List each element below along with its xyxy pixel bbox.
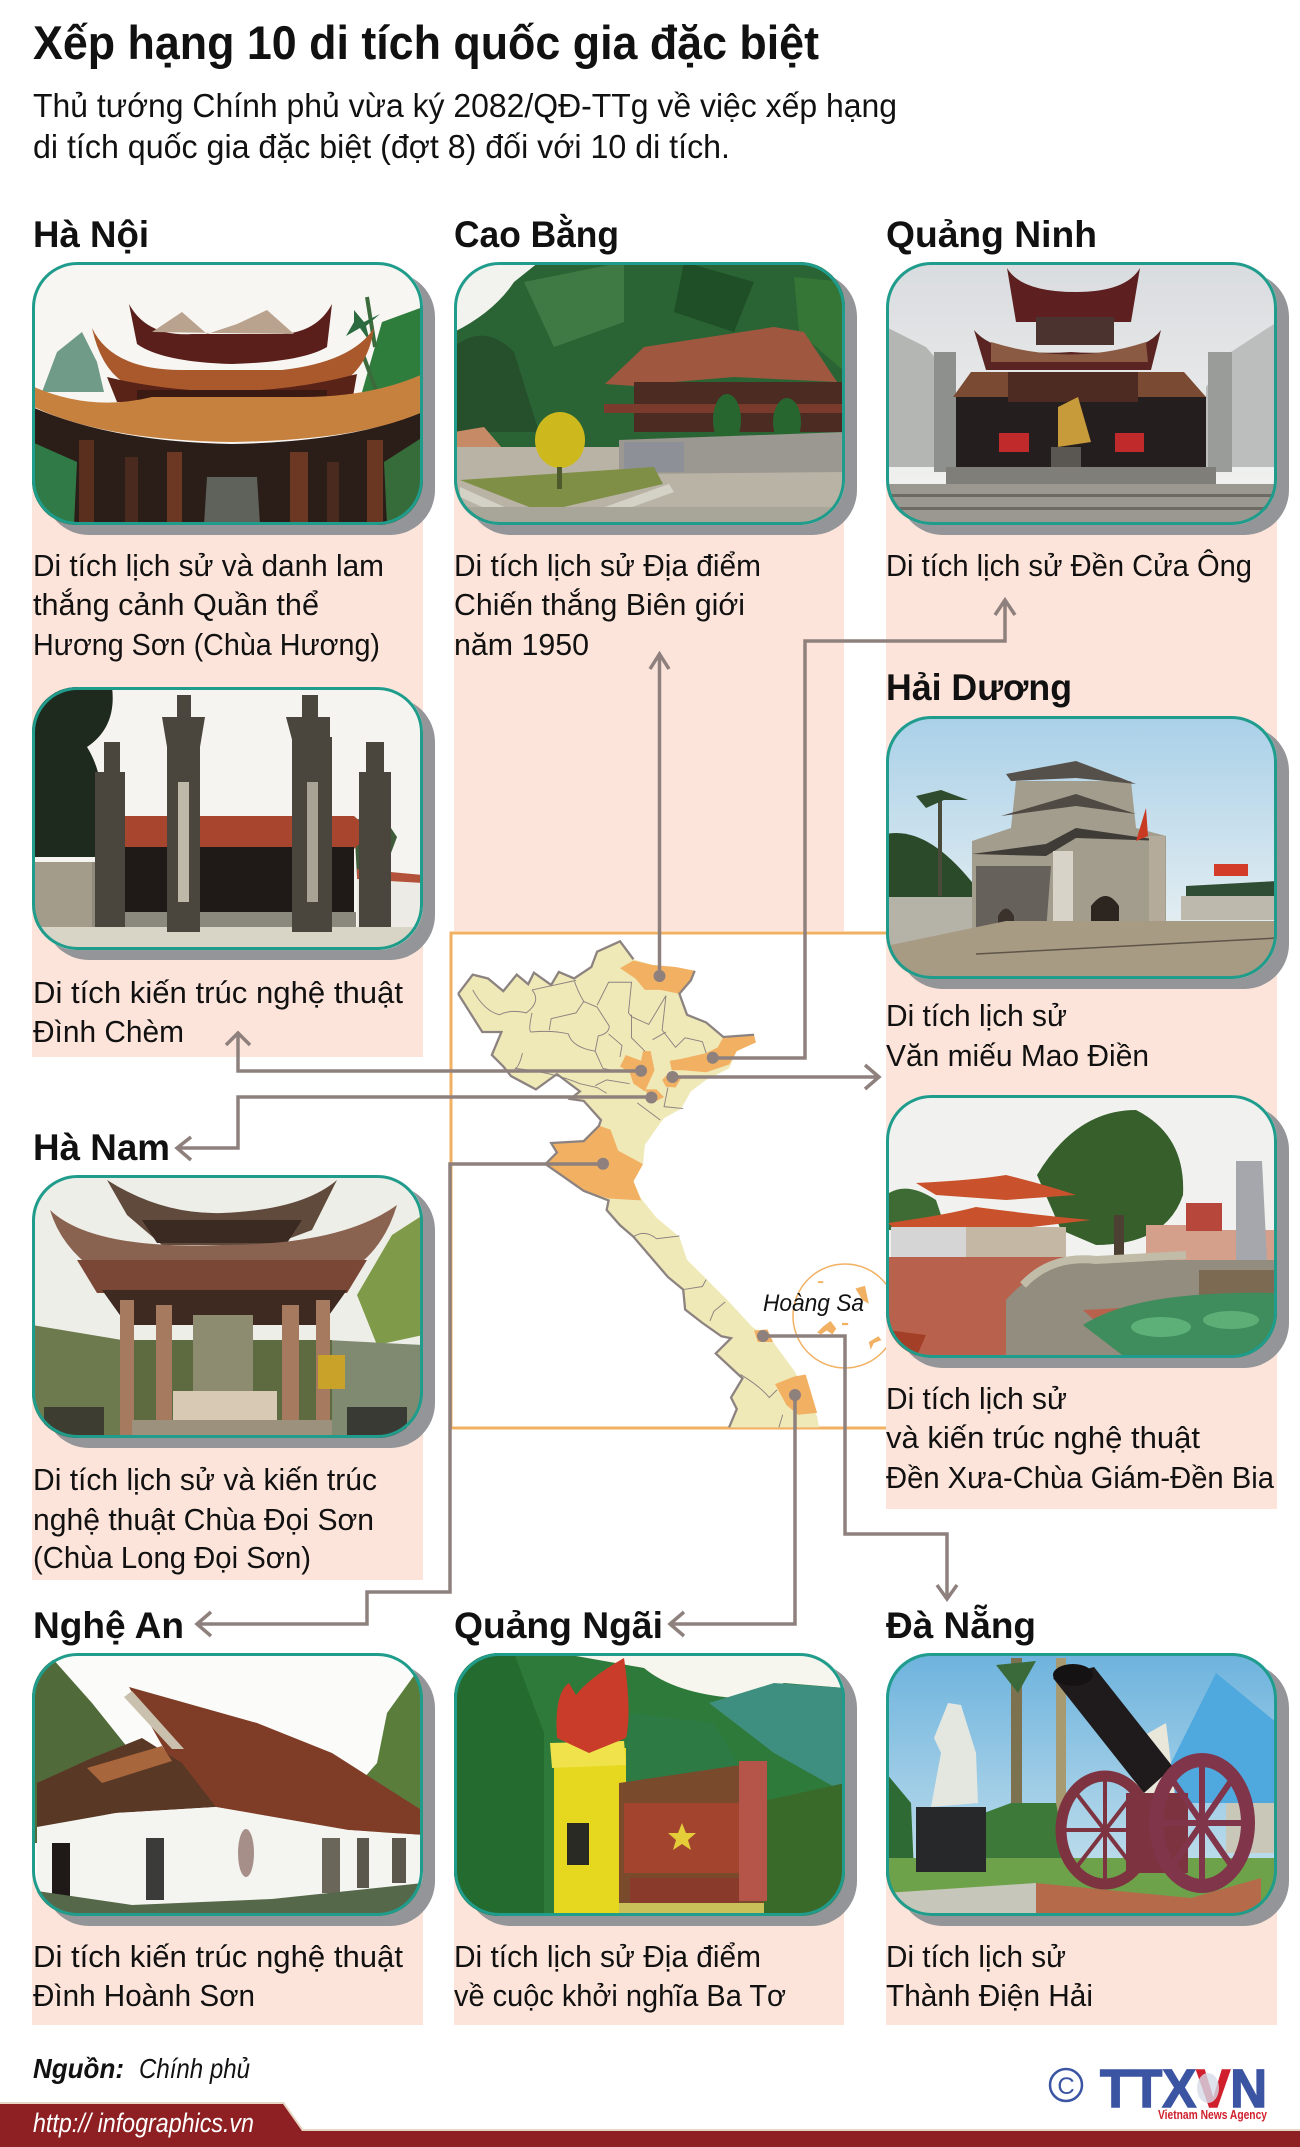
text: Chiến thắng Biên giới: năm 1950 (454, 627, 589, 662)
text: Chùa Đọi Sơn: nghệ thuật Chùa Đọi Sơn (33, 1502, 374, 1537)
text: Đình Chèm: Di tích kiến trúc nghệ thuật (33, 975, 403, 1010)
text: Quần thể Hương Sơn (33, 548, 384, 662)
subtitle (33, 87, 897, 165)
Hoàng Sa inset (763, 1264, 897, 1368)
text: Đền Xưa - Chùa Giám - Đền Bia: và kiến trúc nghệ thuật (886, 1420, 1200, 1455)
photo: Đình Chèm (32, 687, 435, 960)
text: Đình Chèm: Đình Chèm (33, 1014, 184, 1049)
leader arrows (177, 600, 1015, 1636)
arrow: Nghệ An (197, 1164, 603, 1636)
text: Đền Xưa - Chùa Giám - Đền Bia (886, 1381, 1275, 1495)
text: Chùa Đọi Sơn (33, 1462, 377, 1575)
text: Đình Hoành Sơn (33, 1939, 403, 2013)
text: Quần thể Hương Sơn: thắng cảnh Quần thể (33, 587, 319, 622)
panel: Nghệ An (32, 1605, 435, 2025)
website URL: http:// infographics.vn (33, 2108, 254, 2138)
map location dots (597, 970, 801, 1401)
text: Chùa Đọi Sơn: Di tích lịch sử và kiến trúc (33, 1462, 377, 1497)
arrow: Đà Nẵng (763, 1336, 957, 1599)
panel: Đà Nẵng (886, 1604, 1289, 2025)
Hoàng Sa inset: Hoàng Sa (763, 1290, 864, 1317)
text: Đình Hoành Sơn: Đình Hoành Sơn (33, 1978, 255, 2013)
text: Đình Chèm (33, 975, 403, 1049)
text: khởi nghĩa Ba Tơ (454, 1939, 786, 2013)
subtitle: Thủ tướng Chính phủ vừa ký 2082/QĐ-TTg về việc xếp hạng (33, 87, 897, 124)
photo: Chùa Đọi Sơn (32, 1175, 435, 1448)
text: Đền Xưa - Chùa Giám - Đền Bia: Di tích lịch sử (886, 1381, 1067, 1416)
arrow: Quảng Ninh (712, 600, 1015, 1058)
heading: Quảng Ninh: Quảng Ninh (886, 214, 1097, 255)
panel: Cao Bằng (454, 213, 857, 931)
country outline and provinces (458, 941, 819, 1427)
heading: Hà Nam: Hà Nam (33, 1127, 170, 1168)
title: Xếp hạng 10 di tích quốc gia đặc biệt (33, 16, 819, 69)
photo: Đình Hoành Sơn (32, 1653, 435, 1926)
photo: Địa điểm khởi nghĩa Ba Tơ (454, 1653, 857, 1926)
photo: Đền Cửa Ông (886, 262, 1289, 535)
text: Thành Điện Hải: Thành Điện Hải (886, 1978, 1093, 2013)
heading: Hà Nội: Hà Nội (33, 214, 149, 255)
heading: Cao Bằng: Cao Bằng (454, 213, 619, 255)
heading: Đà Nẵng: Đà Nẵng (886, 1604, 1036, 1646)
text: Đình Hoành Sơn: Di tích kiến trúc nghệ thuật (33, 1939, 403, 1974)
logo: TTXVN: C (1057, 2073, 1075, 2100)
text: Thành Điện Hải: Di tích lịch sử (886, 1939, 1066, 1974)
map frame (451, 933, 886, 1428)
arrow: Hải Dương (672, 1065, 879, 1089)
photo: Văn miếu Mao Điền (886, 716, 1289, 989)
subtitle: di tích quốc gia đặc biệt (đợt 8) đối với 10 di tích. (33, 128, 730, 165)
logo: TTXVN: Vietnam News Agency (1158, 2107, 1268, 2122)
text: Quần thể Hương Sơn: Hương Sơn (Chùa Hương) (33, 627, 380, 662)
panel: Quảng Ninh and Hải Dương (886, 214, 1289, 1509)
text: khởi nghĩa Ba Tơ: Di tích lịch sử Địa điểm (454, 1939, 761, 1974)
panel: Hà Nam (32, 1127, 435, 1580)
arrow: Hà Nam (177, 1097, 651, 1160)
text: Chùa Đọi Sơn: (Chùa Long Đọi Sơn) (33, 1540, 311, 1575)
text: Đền Xưa - Chùa Giám - Đền Bia: Đền Xưa-Chùa Giám-Đền Bia (886, 1460, 1275, 1495)
heading: Quảng Ngãi: Quảng Ngãi (454, 1605, 663, 1646)
text: Thành Điện Hải (886, 1939, 1093, 2013)
photo: Đền Xưa - Chùa Giám - Đền Bia (886, 1095, 1289, 1368)
text: Văn miếu Mao Điền: Di tích lịch sử (886, 998, 1067, 1033)
map of Vietnam (451, 933, 897, 1428)
arrow: Hà Nội (226, 1033, 641, 1071)
logo: TTXVN: TTXVN (1100, 2059, 1267, 2119)
photo: Chùa Hương (32, 262, 435, 535)
photo: Địa điểm Chiến thắng Biên giới (454, 262, 857, 537)
source: Chính phủ (139, 2053, 250, 2084)
source (33, 2053, 250, 2084)
arrow: Cao Bằng (650, 654, 669, 976)
text: Chiến thắng Biên giới: Chiến thắng Biên giới (454, 587, 745, 622)
text: Chiến thắng Biên giới (454, 548, 761, 662)
text: Đền Cửa Ông: Di tích lịch sử Đền Cửa Ông (886, 548, 1252, 583)
arrow: Quảng Ngãi (670, 1395, 795, 1636)
text: Chiến thắng Biên giới: Di tích lịch sử Địa điểm (454, 548, 761, 583)
text: Văn miếu Mao Điền (886, 998, 1149, 1073)
text: Văn miếu Mao Điền: Văn miếu Mao Điền (886, 1038, 1149, 1073)
footer bar (0, 2102, 1300, 2147)
panel: Hà Nội (32, 214, 435, 1057)
photo: Thành Điện Hải (886, 1653, 1289, 1926)
panel: Quảng Ngãi (454, 1605, 857, 2025)
heading: Hải Dương: Hải Dương (886, 667, 1072, 708)
text: khởi nghĩa Ba Tơ: về cuộc khởi nghĩa Ba Tơ (454, 1978, 786, 2013)
text: Quần thể Hương Sơn: Di tích lịch sử và danh lam (33, 548, 384, 583)
heading: Nghệ An: Nghệ An (33, 1605, 184, 1646)
source: Nguồn: (33, 2053, 124, 2084)
